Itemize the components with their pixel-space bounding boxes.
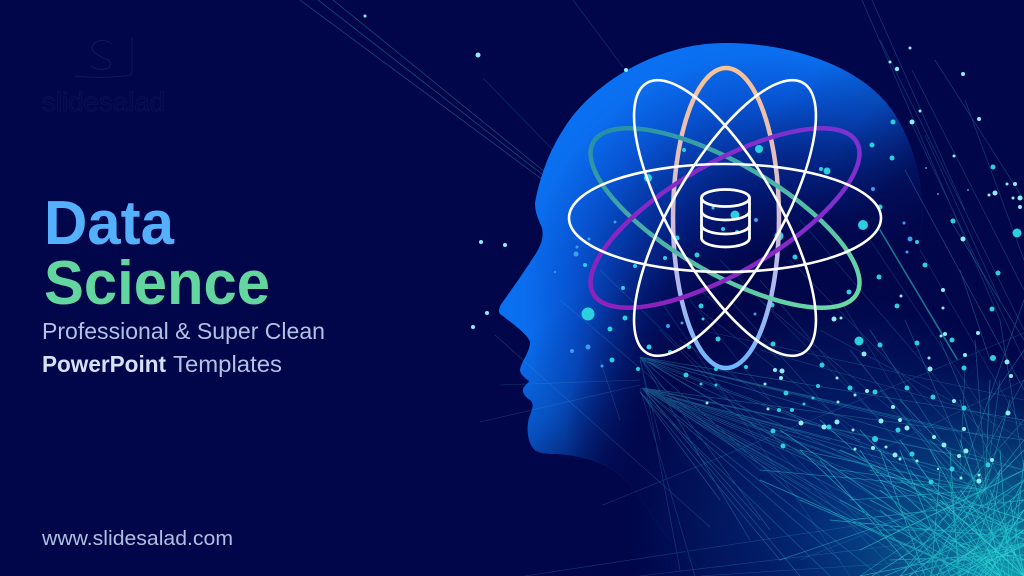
orbit: white rotated left [600,56,850,380]
corner fan [760,420,1024,576]
fan from face [640,357,1024,576]
title word: Science: Science [44,249,270,318]
subtitle [42,318,325,377]
subtitle line 2: PowerPoint [42,351,166,377]
orbit: white rotated right [600,56,850,380]
icon: database [702,190,750,247]
bottom right glow [620,290,1024,576]
blue data points [554,167,969,368]
long thin lines [480,220,1024,576]
logo wordmark: slidesalad [42,87,165,117]
orbit: white horizontal [569,164,881,272]
logo watermark [42,38,165,117]
bright corner lines [930,490,1024,576]
teal streak [880,230,957,359]
lines behind head: upper diagonals [300,0,1024,360]
network lines [480,170,1024,576]
website url: www.slidesalad.com [41,528,233,550]
orbit: purple [566,94,884,342]
orbit: pastel vertical [673,68,779,368]
atom orbits [566,56,884,380]
head silhouette [490,40,930,576]
title [44,189,270,318]
title word: Data: Data [44,189,174,258]
light data points [364,14,1022,484]
data points [582,120,1022,484]
subtitle line 1: Professional & Super Clean [42,318,325,344]
right side lines [850,170,1024,560]
orbit: teal green [566,94,884,342]
subtitle line 2: Templates [173,351,282,377]
icon: logo mark [75,38,132,77]
star burst near corner [760,380,1024,576]
